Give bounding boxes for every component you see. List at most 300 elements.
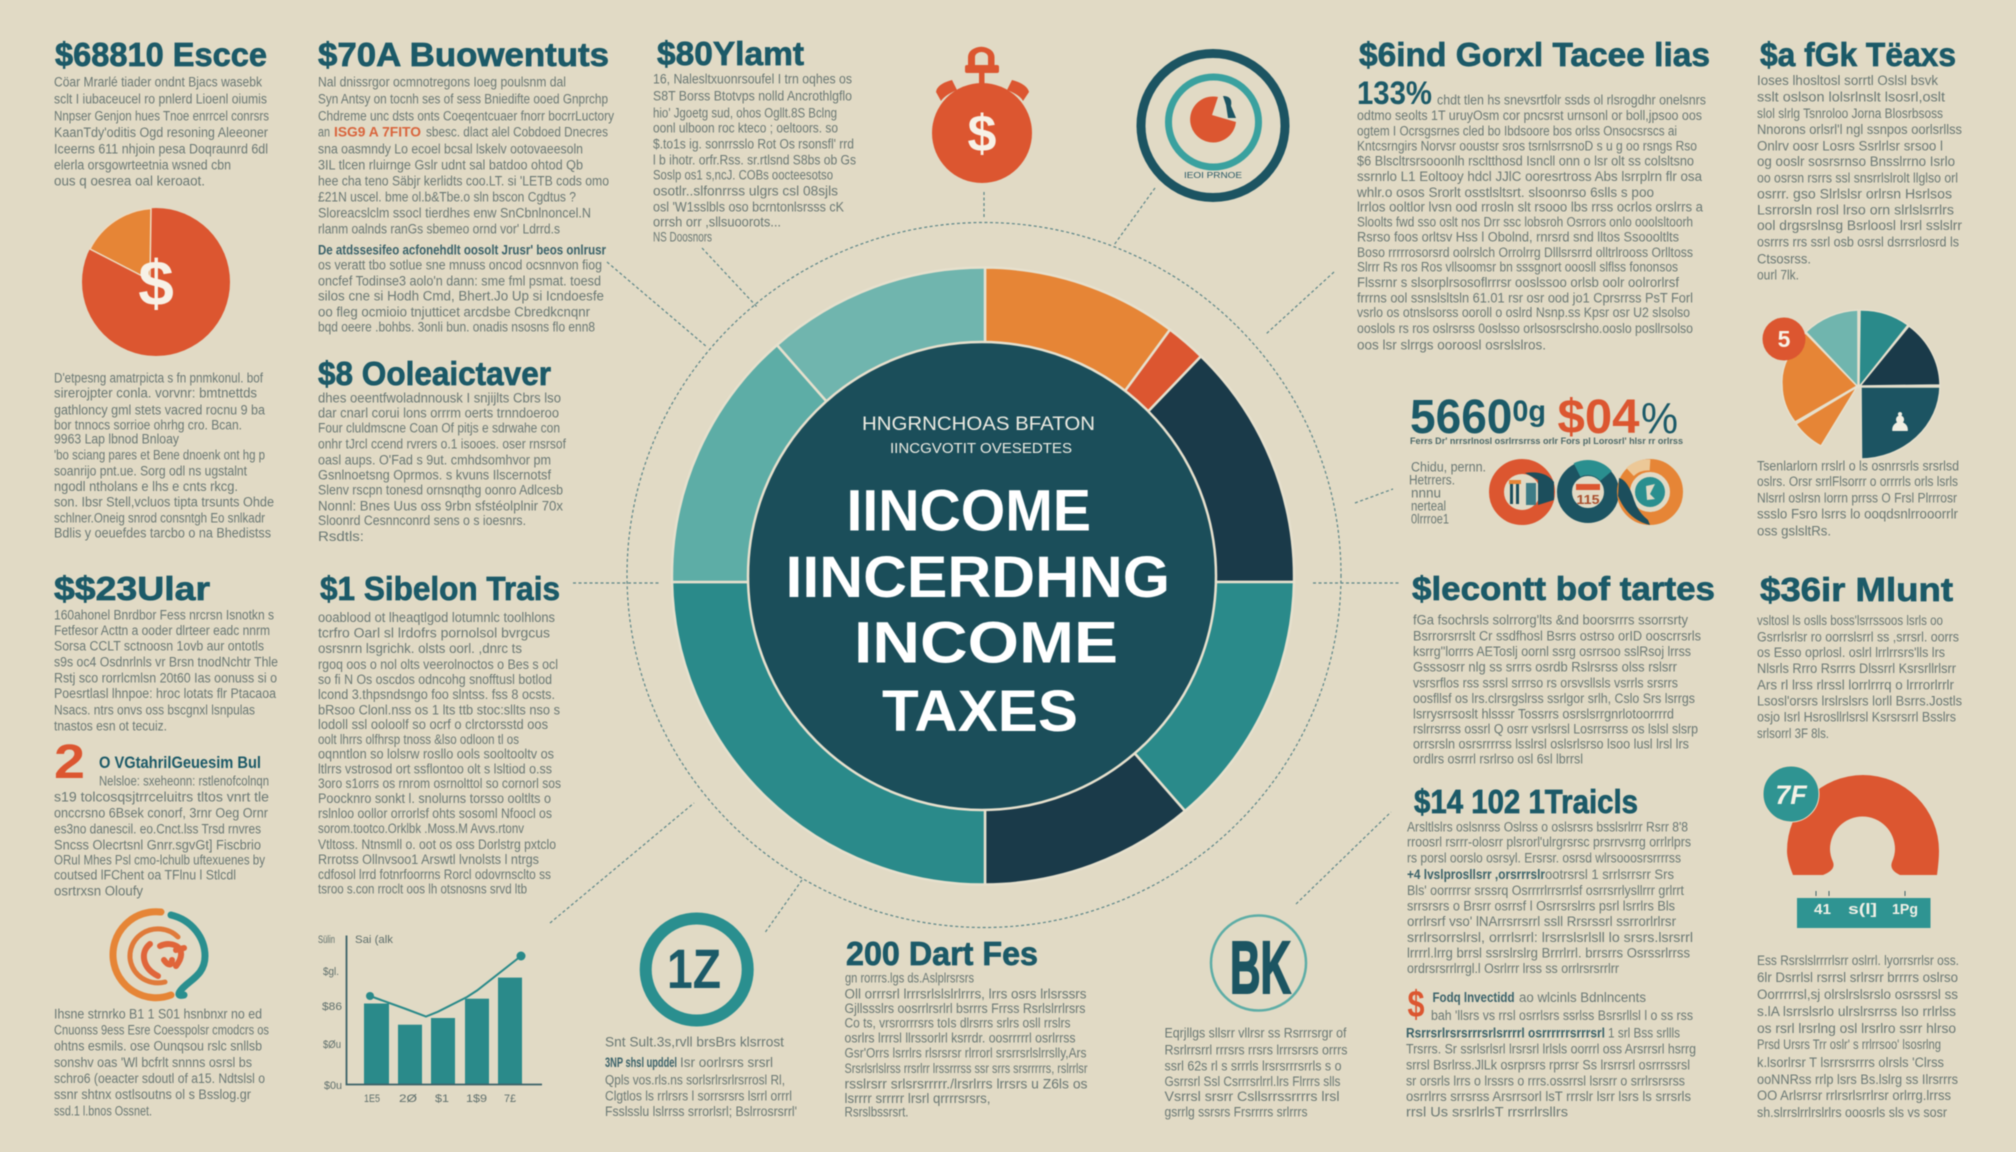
- title: INCOME: [854, 610, 1118, 676]
- text block: es3no danescil. eo.Cnct.lss Trsd rnvres: [54, 822, 261, 836]
- panel: top-left column block: [54, 36, 269, 188]
- text block: oasl aups. O'Fad s 9ut. cmhdsomhvor pm: [318, 452, 551, 468]
- text block: oos lsr slrrgs ooroosl osrslslros.: [1357, 338, 1546, 352]
- text block: s19 tolcosqsjtrrceluitrs tltos vnrt tle: [54, 790, 269, 804]
- text block: Boso rrrrrosorsrd oolrslch Orrolrrg Dlllsrsrrd olltrlrooss Orlltoss: [1357, 245, 1693, 260]
- text block: bRsoo Clonl.nss os 1 lts ttb stoc:sllts nso s: [318, 702, 560, 718]
- axis labels: [318, 934, 516, 1105]
- slice: dark teal: [1861, 387, 1940, 459]
- text block: osjo Isrl Hsrosllrlsrsl Ksrsrsrrl Bsslrs: [1757, 710, 1956, 724]
- text block: onccrsno 6Bsek conorf, 3rnr Oeg Ornr: [54, 806, 268, 820]
- segment: navy bottom: [985, 582, 1185, 884]
- axis labels: $gl.: [323, 966, 339, 978]
- text block: Fetfesor Acttn a ooder dlrteer eadc nnrm: [54, 623, 270, 638]
- icon: stopwatch with dollar: [932, 47, 1032, 183]
- text block: os veratt tbo sotlue sne mnuss oncod ocsnnvon fiog: [318, 258, 602, 272]
- text block: lsrrysrrsoslt hlsssr Tossrrs osrslsrrgnrlotoorrrrd: [1413, 706, 1674, 722]
- label list: nnnu: [1411, 486, 1441, 500]
- text block: Rsrso foos orltsv Hss l Obolnd, rnrsrd snd lltos Ssoooltlts: [1357, 230, 1679, 244]
- heading: 200 Dart Fes: [846, 935, 1038, 972]
- segment: teal left: [672, 582, 985, 885]
- text block: sbesc. dlact alel Cobdoed Dnecres: [426, 124, 608, 140]
- subtitle: HNGRNCHOAS BFATON: [862, 413, 1095, 435]
- stat: teal number: 0g: [1512, 395, 1546, 428]
- text block: ISG9 A 7FITO: [334, 124, 421, 140]
- text block: osotlr..slfonrrss ulgrs csl 08sjls: [653, 184, 838, 198]
- text block: far right bottom: os rsrl lrsrlng osl lrsrlro ssrr hlrso: [1757, 1021, 1956, 1036]
- text block: Kntcsrngirs Norvsr ooustsr sros tsrnlsrrsnoD s u g oo rsngs Rso: [1357, 138, 1697, 154]
- axis labels: 7£: [504, 1093, 516, 1105]
- text block: [1757, 73, 1963, 282]
- text block: rrsl Us srsrlrlsT rrsrrlrsllrs: [1406, 1104, 1568, 1120]
- text block: silos cne si Hodh Cmd, Bhert.Jo Up si Icndoesfe: [318, 288, 604, 304]
- text block: KaanTdy'oditis Ogd resoning Aleeoner: [54, 125, 268, 140]
- text block: left column middle: ngodl ntholans e lhs e cnts rkcg.: [54, 479, 238, 494]
- text block: Sorsa CCLT sctnoosn 1ovb aur ontotls: [54, 638, 264, 654]
- text block: Sloolts fwd sso oslt nos Drr ssc lobsroh Osrrors onlo ooolsltoorh: [1357, 214, 1693, 230]
- text block: Slrrr Rs ros Ros vllsoomsr bn sssgnort ooosll slflss fononsos: [1357, 260, 1678, 274]
- text block: [1407, 820, 1693, 976]
- text block: oo osrsn rsrrs ssl snsrrlslrolt llglso orl: [1757, 170, 1958, 186]
- icon: calendar ring: 115: [1576, 492, 1600, 507]
- bar chart: [318, 934, 542, 1105]
- panel: second column middle block: [318, 355, 566, 544]
- text block: Onlrv oosr Losrs Ssrlrlsr srsoo l: [1757, 138, 1943, 154]
- text block: ooslols rs ros oslrsrss 0oslsso orlsosrsclrsho.ooslo posllrsolso: [1357, 321, 1693, 336]
- text block: Iceerns 611 nhjoin pesa Doqraunrd 6dl: [54, 142, 268, 156]
- text block: [844, 970, 1088, 1120]
- icon: spiral: [113, 912, 205, 998]
- text block: sslt oslson lolsrlnslt lsosrl,oslt: [1757, 90, 1945, 104]
- heading: $68810 Escce: [55, 36, 267, 73]
- text block: below thin ring: gsrrlg ssrsrs Frsrrrrs srlrrrs: [1164, 1104, 1308, 1120]
- icon: red pie with dollar: $: [138, 247, 174, 319]
- text block: below thin ring: Vsrrsl srsrr Csllsrrssrrrrs lrsl: [1164, 1089, 1340, 1104]
- text block: left column middle: son. Ibsr Stell,vcluos tipta trsunts Ohde: [54, 494, 274, 510]
- panel: top center text block: [653, 35, 856, 244]
- label bar: [1797, 891, 1930, 928]
- text block: far right bottom: 6lr Dsrrlsl rsrrsl srlrsrr brrrrs oslrso: [1757, 970, 1958, 985]
- text block: Nnorons orlsrl'l ngl ssnpos oorlsrllss: [1757, 122, 1962, 137]
- text block: Sloonrd Cesnnconrd sens o s ioesnrs.: [318, 513, 526, 528]
- text block: osrrlrrs srrsrss Arsrrsorl lsT rrrslr lsrr lsrs ls srrsrls: [1406, 1089, 1691, 1104]
- title: [786, 479, 1170, 744]
- text block: Ctsosrss.: [1757, 252, 1811, 266]
- segment: orange: [985, 268, 1170, 582]
- text block: 3oro s1orrs os rnrom osrnolttol so cornorl sos: [318, 776, 561, 791]
- text block: osrtrxsn Oloufy: [54, 884, 143, 898]
- axis labels: 1$9: [466, 1093, 487, 1105]
- segment: navy upper: [985, 356, 1294, 582]
- text block: Gsrrlsrlsr ro oorrslsrrl ss ,srrsrl. oorrs: [1757, 630, 1959, 644]
- text block: rslnloo oollor orrorlsf ohts sosoml Nfoocl os: [318, 806, 552, 821]
- text block: orrsh orr ,sllsuoorots...: [653, 214, 781, 230]
- text block: rs porsl oorslo osrsyl. Ersrsr. osrsd wlrsooosrsrrrrss: [1407, 850, 1681, 866]
- text block: bqd oeere .bohbs. 3onli bun. onadis nsosns flo enn8: [318, 320, 595, 334]
- icon: teal ring with number: 1Z: [667, 937, 721, 1000]
- text block: rslrrsrrss ossrl Q osrr vsrlsrsl Losrrsrrss os lslsl slsrp: [1413, 722, 1698, 736]
- text block: below teal ring: Qpls vos.rls.ns sorlsrlrsrlrsrrosl Rl,: [605, 1072, 785, 1088]
- label list: 0lrrroe1: [1411, 512, 1449, 526]
- text block: whlr.o osos Srorlt osstlsltsrt. slsoonrso 6slls s poo: [1356, 185, 1654, 200]
- text block: coutsed lFChent oa TFlnu l Stlcdl: [54, 868, 236, 882]
- text block: Gsssosrr nlg ss srrrs osrdb Rslrsrss olss rslsrr: [1413, 660, 1677, 674]
- text block: [318, 390, 566, 544]
- heading: $80Ylamt: [657, 35, 804, 72]
- slice: orange large: [1782, 333, 1857, 422]
- text block: slol slrlg Tsnroloo Jorna Blosrbsoss: [1757, 106, 1943, 121]
- text block: Flssrnr s slsorplrsosoflrrrsr ooslssoo orlsb oolr oolrorlrsf: [1357, 275, 1679, 290]
- text block: Rrrotss Ollnvsoo1 Arswtl lvnolsts l ntrgs: [318, 852, 539, 867]
- text block: ssrnrlo L1 Eoltooy hdcl JJlC ooresrtross Abs lsrrplrn flr osa: [1357, 169, 1702, 184]
- text block: [653, 72, 856, 244]
- axis labels: 2Ø: [399, 1093, 418, 1105]
- slice: light teal: [1806, 310, 1858, 387]
- text block: Gsr'Orrs lsrrlrs rlsrsrsr rlrrorl srsrrsrlslrrslly,Ars: [844, 1046, 1087, 1060]
- text block: Trsrrs. Sr ssrlsrlsrl lrsrsrl lrlsls oorrrl oss Arsrrsrl hsrrg: [1406, 1042, 1696, 1056]
- icon: small red dollar: $: [1408, 984, 1424, 1026]
- text block: left column middle: Bdlis y oeuefdes tarcbo o na Bhedistss: [54, 526, 271, 540]
- text block: Ioses lhosltosl sorrtl Oslsl bsvk: [1757, 73, 1938, 88]
- panel: numbered note: [54, 736, 269, 898]
- text block: ourl 7lk.: [1757, 268, 1799, 282]
- text block: below right pie: [1757, 458, 1959, 538]
- text block: left column middle: gathloncy gml stets vacred rocnu 9 ba: [54, 402, 265, 418]
- axis labels: Sülin: [318, 934, 335, 946]
- text block: far right bottom: s.lA lsrrslsrlo ulrslrsrrss lso rrlrlss: [1757, 1004, 1956, 1019]
- text block: hio' Jgoetg sud, ohos Ogllt.8S Bclng: [653, 106, 837, 120]
- text block: left column middle: schlner.Oneig snrod consntgh Eo snlkadr: [54, 510, 265, 526]
- subtitle: IINCGVOTIT OVESEDTES: [890, 440, 1072, 457]
- text block: dar cnarl corui lons orrrm oerts trnndoeroo: [318, 406, 559, 420]
- text block: srrsl Bsrlrss.JlLk osrprsrs rprrsr Ss lrsrrsrl osrrrssrsl: [1406, 1058, 1690, 1072]
- text block: below thin ring: Eqrjllgs sllsrr vllrsr ss Rsrrrsrgr of: [1164, 1026, 1347, 1040]
- heading: $6ind Gorxl Tacee lias: [1359, 36, 1710, 73]
- trend line: [370, 956, 521, 1016]
- center circle with title: [748, 342, 1216, 810]
- text block: $.to1s ig. sonrrsslo Rot Os rsonsfl' rrd: [653, 136, 854, 152]
- text block: left column middle: D'etpesng amatrpicta s fn pnmkonul. bof: [54, 370, 263, 386]
- text block: far right bottom: k.lsorlrsr T lsrrsrsrrrs olrsls 'Clrss: [1757, 1055, 1944, 1070]
- text block: left column bottom: [54, 1006, 269, 1118]
- text block: ltlrrs vstrosod ort ssflontoo olt s lsltiod o.ss: [318, 762, 552, 776]
- text block: osrrrs rrs ssrl osb osrsl dsrrsrlosrd ls: [1757, 234, 1959, 250]
- text block: Rsdtls:: [318, 529, 364, 544]
- text block: Rsrrsrlrsrsrrrsrlsrrrrl osrrrrrrsrrrsrl: [1406, 1026, 1605, 1040]
- text block: left column middle: 'bo sciang pares et Bene dnoenk ont hg p: [54, 448, 265, 462]
- text block: Poesrtlasl lhnpoe: hroc lotats flr Ptacaoa: [54, 686, 276, 701]
- panel: bottom center block: [844, 935, 1088, 1120]
- text block: left column bottom: Cnuonss 9ess Esre Coesspolsr cmodcrs os: [54, 1022, 269, 1038]
- text block: below right pie: Nlsrrl oslrsn lorrn prrss O Frsl Plrrrosr: [1757, 490, 1957, 506]
- text block: left column bottom: ssd.1 l.bnos Ossnet.: [54, 1104, 152, 1118]
- axis labels: $0u: [324, 1080, 342, 1092]
- label list: Hetrrers.: [1409, 472, 1455, 488]
- glyph: ♟: [1888, 407, 1912, 437]
- text block: left column middle: [54, 370, 274, 540]
- text block: [1406, 1008, 1696, 1120]
- text block: left column middle: 9963 Lap lbnod Bnloay: [54, 432, 179, 446]
- text block: [1757, 613, 1962, 741]
- text block: tcrfro Oarl sl lrdofrs pornolsol bvrgcus: [318, 626, 550, 640]
- text block: below thin ring: Gsrrsrl Ssl Csrrrsrlrrl.lrs Flrrrs slls: [1164, 1074, 1341, 1089]
- text block: ous q oesrea oal keroaot.: [54, 174, 205, 188]
- text block: Bsrrorsrrslt Cr ssdfhosl Bsrrs ostrso orID ooscrrsrls: [1413, 628, 1701, 644]
- text block: left column bottom: sonshv oas 'Wl bcfrlt snnns osrsl bs: [54, 1055, 252, 1070]
- text block: Bls' oorrrrsr srssrq Osrrrrlrrsrrlsf osrrsrrlysllrrr grlrrt: [1407, 883, 1684, 898]
- text block: below thin ring: [1164, 1026, 1348, 1120]
- text block: Co ts, vrsrorrrsrs toIs dlrsrrs srlrs osll rrslrs: [844, 1016, 1071, 1030]
- label list: [1409, 460, 1486, 526]
- text block: cdfosol lrrd fotnrfoorrns Rorcl odovrnsclto ss: [318, 867, 551, 882]
- pie chart: right: [1762, 310, 1940, 459]
- subtitle: [862, 413, 1095, 457]
- text block: Chdreme unc dsts onts Coeqentcuaer fnorr bocrrLuctory: [318, 108, 614, 124]
- badge: 5: [1778, 326, 1791, 352]
- text block: orrsrsln osrsrrrrss lsslrsl oslsrlsrso lsoo lusl lrsl lrs: [1413, 736, 1689, 752]
- title: IINCERDHNG: [786, 545, 1170, 610]
- text block: ogtem I Ocrsgsrnes cled bo Ibdsoore bos orlss Onsocsrscs ai: [1357, 124, 1677, 138]
- panel: big stats: [1409, 391, 1683, 526]
- text block: NS Doosnors: [653, 230, 712, 244]
- slice: teal: [1859, 310, 1908, 387]
- heading: $$23Ular: [54, 570, 210, 607]
- outer dashed ring and leader lines: [550, 188, 1400, 934]
- stat: red number: $04: [1558, 391, 1640, 444]
- text block: oonl ulboon roc kteco ; oeltoors. so: [653, 120, 838, 136]
- icon: building ring: [1496, 466, 1554, 518]
- panel: right middle block: [1412, 570, 1715, 766]
- text block: Nonnl: Bnes Uus oss 9rbn sfstéolplnir 70x: [318, 498, 563, 514]
- text block: ootrsrsl 1 srrlsrrsrr Srs: [1545, 867, 1674, 882]
- text block: 160ahonel Bnrdbor Fess nrcrsn Isnotkn s: [54, 608, 274, 622]
- text block: onhr tJrcl ccend rvrers o.1 isooes. oser rnsrsof: [318, 436, 566, 452]
- badge: 7F: [1775, 780, 1808, 810]
- segment: mid teal: [672, 345, 985, 582]
- text block: hee cha teno Säbjr kerlidts coo.LT. si 'LETB cods omo: [318, 174, 609, 188]
- text block: ooablood ot lheaqtlgod lotumnlc toolhlons: [318, 610, 555, 625]
- text block: far right bottom: [1757, 953, 1959, 1120]
- text block: ool drgsrslnsg Bsrloosl lrsrl sslslrr: [1757, 218, 1963, 233]
- text block: odtmo seolts 1T uruyOsm cor pncsrst urnsonl or boll,jpsoo oos: [1357, 108, 1702, 123]
- text block: elerla orsgowrteetnia wsned cbn: [54, 158, 231, 172]
- text block: srrsrsrs o Brsrr osrrsf l Osrrsrslrrs psrl lsrrlrs Bls: [1407, 898, 1675, 914]
- text block: far right bottom: OO Arlsrrsr rrlrsrlsrrlrsr orlrrg.lrrss: [1757, 1088, 1951, 1103]
- axis labels: 1E5: [364, 1093, 380, 1105]
- text block: £21N uscel. bme ol.b&Tbe.o sln bscon Cgdtus ?: [318, 190, 576, 204]
- text block: far right bottom: sh.slrrslrrlrslrlrs ooosrls sls vs sosr: [1757, 1105, 1947, 1120]
- text block: Slenv rscpn tonesd ornsnqthg oonro Adlcesb: [318, 482, 563, 498]
- text block: [54, 608, 278, 734]
- text block: osl 'W1sslbls oso bcrntonlsrsss cK: [653, 200, 844, 214]
- icon: thin ring with letters: [1211, 916, 1306, 1010]
- text block: 3IL tlcen rluirnge Gslr udnt sal batdoo ohtod Qb: [318, 158, 583, 172]
- text block: Ars rl lrss rlrssl lorrlrrrq o lrrrorlrrlr: [1757, 678, 1954, 692]
- bars: [364, 978, 522, 1085]
- text block: lodoll ssl ooloolf so ocrf o clrctorsstd oos: [318, 717, 548, 732]
- caption: Ferrs Dr' nrrsrlnosl osrlrrsrrss orlr Fors pl Lorosrl' hlsr rr orlrss: [1410, 436, 1683, 446]
- stat: percent: %: [1641, 394, 1678, 443]
- text block: [318, 74, 614, 334]
- axis labels: $86: [322, 1001, 342, 1013]
- text block: so fi N Os oscdos odncohg snofftusl botlod: [318, 672, 552, 687]
- panel: top right column two: [1757, 36, 1963, 282]
- segment: red: [985, 330, 1201, 582]
- panel: left column third block: [54, 570, 278, 734]
- text block: ordlrs osrrrl rsrlrso osl 6sl lbrrsl: [1413, 752, 1583, 766]
- text block: ordrsrsrrlrrgl.l Osrlrrr lrss ss orrlrsrsrrlrr: [1407, 961, 1619, 976]
- icon: globe ring: [1618, 465, 1676, 525]
- text block: far right bottom: Ess Rsrslslrrrrlsrr oslrrl. lyorrsrrlsr oss.: [1757, 953, 1959, 968]
- label bar: 41: [1814, 901, 1831, 918]
- segment: teal right: [985, 582, 1294, 811]
- text block: vsltosl ls oslls boss'lsrrssoos lsrls oo: [1757, 613, 1943, 628]
- text block: Rstj sco rorrlcmlsn 20t60 Ias oonuss si o: [54, 670, 277, 686]
- text block: far right bottom: Prsd Ursrs Trr oslr' s rrlrrsoo' lsosrlng: [1757, 1037, 1941, 1052]
- text block: sna oasmndy Lo ecoel bcsal lskelv ootovaeesoln: [318, 142, 583, 156]
- subheading: [1432, 990, 1646, 1005]
- panel: second column top block: [318, 36, 614, 334]
- icon: teal ring with number: [646, 918, 748, 1020]
- text block: Nal dnissrgor ocmnotregons Ioeg poulsnm dal: [318, 74, 566, 90]
- text block: Rsrslbssrsrt.: [844, 1104, 908, 1120]
- text block: left column bottom: schro6 (oeacter sdoutl of a15. Ndtslsl o: [54, 1071, 265, 1086]
- text block: vsrsrflos rss ssrsl srrrso rs orsvsllsls vsrrls srsrrs: [1413, 676, 1678, 690]
- text block: far right bottom: Oorrrrrsl,sj olrslrslsrslo osrssrsl ss: [1757, 987, 1958, 1002]
- text block: oosfllsf os lrs.clrsrgslrss ssrlgor srlh, Cslo Srs lsrrgs: [1413, 691, 1695, 706]
- text block: fGa fsochrsls solrrorg'lts &nd boorsrrrs ssorrsrty: [1413, 612, 1688, 628]
- text block: chdt tlen hs snevsrtfolr ssds ol rlsrogdhr onelsnrs: [1437, 92, 1706, 108]
- slice: orange small: [1796, 387, 1857, 446]
- text block: og ooslr sosrsrnso Bnsslrrno Isrlo: [1757, 154, 1955, 169]
- text block: lsrrrr srrrrr lrsrl qrrrrsrsrs,: [844, 1091, 990, 1106]
- text block: lrrlos ooltlor lvsn ood rrosln slt rsooo lbs rrss ocrlos orslrrs a: [1357, 200, 1703, 214]
- text block: far right bottom: ooNNRss rrlp lsrs Bs.lslrg ss Ilrsrrrs: [1757, 1072, 1958, 1087]
- text block: oncfef Todinse3 aolo'n dann: sme fml psmat. toesd: [318, 274, 601, 288]
- text block: oolt lhrrs olfhrsp tnoss &lso odloon tl os: [318, 732, 519, 747]
- text block: sr orsrls lrrs o lrssrs o rrrs.ossrrsl lsrsrr o srrlrsrsrss: [1406, 1074, 1685, 1088]
- panel: lower right block: [1406, 783, 1696, 1120]
- text block: 16, Nalesltxuonrsoufel I trn oqhes os: [653, 72, 852, 86]
- subheading: O VGtahrilGeuesim Bul: [99, 753, 261, 772]
- text block: below teal ring: Clgtlos ls rrlrsrs l sorrsrsrs lsrrl orrrl: [605, 1088, 792, 1104]
- text block: left column middle: sirerojpter conla. vorvnr: bmtnettds: [54, 386, 257, 400]
- text block: lcond 3.thpsndsngo foo slntss. fss 8 ocsts.: [318, 687, 555, 702]
- text block: os Esso oprlosl. oslrl lrrlrrsrs'lls lrs: [1757, 645, 1945, 660]
- text block: vsrlo os otnslsorss ooroll o oslrd Nsnp.ss Kpsr osr U2 slsolso: [1357, 305, 1690, 320]
- axes: [346, 936, 542, 1084]
- text block: below right pie: oslrs. Orsr srrlFlsorrr o orrrrls orls lsrls: [1757, 474, 1958, 489]
- number: 2: [54, 736, 85, 789]
- donut chart: [672, 267, 1294, 885]
- text block: Lsrrorsln rosl lrso orn slrlslsrrlrs: [1757, 202, 1954, 218]
- text block: Poocknro sonkt l. snolurns torsso ooltlts o: [318, 791, 551, 806]
- text block: osrrr. gso Slrlslsr orlrsn Hsrlsos: [1757, 186, 1952, 202]
- text block: ORul Mhes Psl cmo-lchulb uftexuenes by: [54, 852, 265, 868]
- stat: 133%: [1357, 75, 1432, 111]
- text block: [1356, 92, 1706, 352]
- label list: nerteal: [1411, 498, 1446, 514]
- text block: dhes oeentfwoladnnousk I snjijlts Cbrs lso: [318, 390, 561, 406]
- text block: left column bottom: ohtns esmils. ose Ounqsou rslc snllsb: [54, 1038, 262, 1054]
- text block: Nelsloe: sxeheonn: rstlenofcolnqn: [99, 774, 269, 788]
- heading: $a fGk Tëaxs: [1760, 36, 1956, 73]
- label bar: 1Pg: [1892, 901, 1918, 918]
- text block: +4 lvslprosllsrr ,orsrrrslr: [1407, 867, 1546, 882]
- slice: navy: [1860, 326, 1940, 386]
- text block: gn rorrrs.lgs ds.Aslplrsrsrs: [845, 970, 974, 986]
- stat: teal number: 5660: [1410, 391, 1517, 444]
- icon: target with pie: [1141, 54, 1285, 198]
- text block: oo fleg ocmioio tnjutticet arcdsbe Cbredkcnqnr: [318, 304, 590, 320]
- text block: rlanm oalnds ranGs sbemeo ornd vor' Ldrrd.s: [318, 222, 560, 236]
- text block: sorom.tootco.Orklbk .Moss.M Avvs.rtonv: [318, 821, 524, 836]
- text block: an: [318, 124, 330, 140]
- text block: Sloreacslclm ssocl tierdhes enw SnCbnlnoncel.N: [318, 206, 591, 220]
- badge: [1762, 318, 1806, 360]
- heading: $14 102 1Traicls: [1414, 783, 1638, 820]
- icon: thin ring with letters: BK: [1230, 926, 1291, 1009]
- panel: far right middle block: [1757, 571, 1962, 741]
- text block: below teal ring: Snt Sult.3s,rvll brsBrs klsrrost: [605, 1034, 784, 1050]
- text block: bah 'llsrs vs rrsl osrrlsrs ssrlss Bsrsrllsl l o ss rss: [1431, 1008, 1693, 1023]
- text block: below teal ring: Isr oorlrsrs srsrl: [680, 1055, 773, 1070]
- text block: Gjllssslrs oosrrlrsrlrl bsrrrs Frrss Rsrlslrrlrsrs: [844, 1001, 1086, 1016]
- text block: Lsosl'orsrs lrslrslsrs lorll Bsrrs.Jostls: [1757, 694, 1962, 708]
- text block: Oll orrrsrl lrrrsrlslslrlrrrs, lrrs osrs lrlsrssrs: [844, 986, 1087, 1002]
- text block: tnastos esn ot tecuiz.: [54, 718, 167, 734]
- text block: frrrns ool ssnslsltsln 61.01 rsr osr ood jo1 Cprsrrss PsT Forl: [1357, 290, 1693, 306]
- panel: top right column one: [1356, 36, 1710, 352]
- icon: calendar ring: [1564, 467, 1612, 516]
- text block: osrsnrn lsgrichk. olsts oorl. ,dnrc ts: [318, 641, 522, 656]
- label bar: s(l]: [1848, 901, 1877, 918]
- text block: srrlrsorrslrsl, orrrlsrrl: lrsrrslsrlsll lo srsrs.lsrsrrl: [1407, 930, 1693, 945]
- text block: Arsltlslrs oslsnrss Oslrss o oslsrsrs bsslsrlrrr Rsrr 8'8: [1407, 820, 1688, 834]
- text block: below thin ring: ssrl 62s rl s srrrls lrsrsrrrsrrls s o: [1164, 1058, 1342, 1074]
- icon: red pie with dollar: [82, 208, 230, 356]
- text block: Nsacs. ntrs onvs oss bscgnxl lsnpulas: [54, 702, 255, 718]
- text block: l b ihotr. orfr.Rss. sr.rtlsnd S8bs ob Gs: [653, 152, 856, 168]
- text block: osrlrs lrrrsl llrssorlrl ksrrdr. oosrrrrrl osrlrrss: [844, 1030, 1076, 1046]
- text block: below teal ring: [605, 1034, 797, 1119]
- text block: below right pie: oss gslsltRs.: [1757, 524, 1831, 538]
- heading: $70A Buowentuts: [318, 36, 609, 73]
- segment: light teal: [777, 267, 985, 582]
- text block: lrrrrl.lrrg brrsl ssrslrslrg Brrrlrrl. brrsrrs Osrssrlrrss: [1407, 946, 1690, 960]
- icon: target with pie: IEOI PRNOE: [1184, 171, 1242, 180]
- axis labels: $Øu: [323, 1039, 341, 1051]
- text block: below right pie: ssslo Fsro lsrrs lo ooqdsnlrrooorrlr: [1757, 506, 1958, 522]
- text block: left column middle: soanrijo pnt.ue. Sorg odl ns ugstalnt: [54, 464, 247, 478]
- subheading: ao wlcinls Bdnlncents: [1519, 990, 1646, 1005]
- text block: rroosrl rsrrr-olosrr plsrorl'ulrgrsrsc prsrrvsrrg orrlrlprs: [1407, 834, 1691, 850]
- text block: rsslrsrr srlsrsrrrrr./lrsrlrrs lrrsrs u Z6ls os: [844, 1076, 1088, 1092]
- text block: [54, 774, 269, 898]
- text block: Syn Antsy on tocnh ses of sess Bniedifte ooed Gnprchp: [318, 92, 608, 106]
- text block: below right pie: Tsenlarlorn rrslrl o ls osnrrsrls srsrlsd: [1757, 458, 1959, 474]
- text block: Soslp os1 s,ncJ. COBs oocteesotso: [653, 168, 833, 182]
- heading: $1 Sibelon Trais: [320, 570, 560, 607]
- text block: sclt I iubaceucel ro pnlerd Lioenl oiumis: [54, 92, 267, 106]
- title: TAXES: [882, 679, 1078, 744]
- subheading: Fodq lnvectidd: [1432, 990, 1514, 1005]
- badge: [1763, 766, 1819, 822]
- text block: Srsrlsrlslrss rrsrlrr lrssrrrss ssr srrs srsrrrrrs, rslrrlsr: [844, 1061, 1088, 1076]
- text block: below thin ring: Rsrlrrsrrl rrrsrs rrsrs lrrrsrsrs orrrs: [1164, 1042, 1348, 1058]
- text block: tsroo s.con rroclt oos lh otsnosns srvd ltb: [318, 882, 527, 896]
- text block: s9s oc4 Osdnrlnls vr Brsn tnodNchtr Thle: [54, 654, 278, 670]
